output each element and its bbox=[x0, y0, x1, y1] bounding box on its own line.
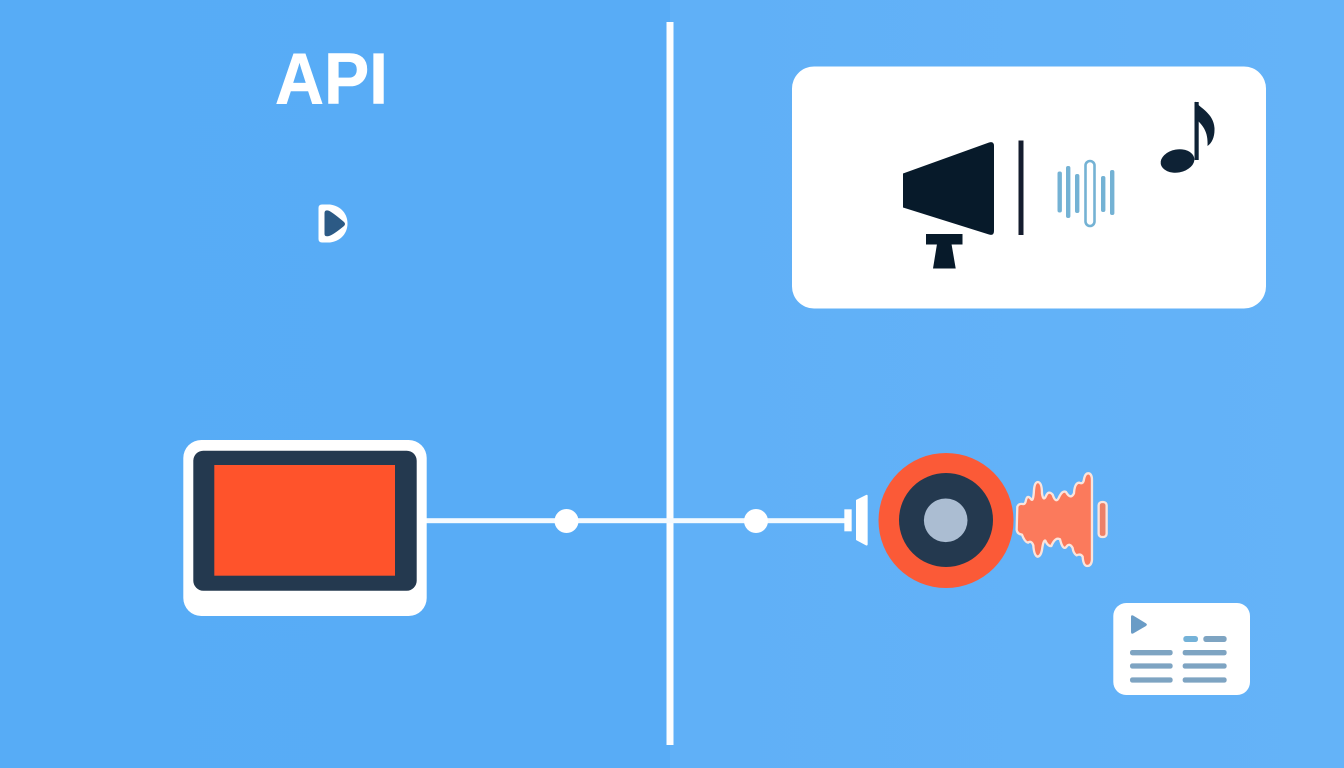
heading: API: API bbox=[275, 40, 388, 120]
icon: music note bbox=[1159, 102, 1215, 175]
divider bar bbox=[1018, 140, 1024, 235]
icon: red sound wave bbox=[1017, 473, 1107, 566]
icon: sound wave bbox=[1058, 161, 1114, 226]
text lines bbox=[1130, 636, 1227, 683]
icon: megaphone bbox=[903, 142, 994, 268]
icon: play badge bbox=[318, 204, 348, 242]
screen bbox=[214, 465, 395, 576]
connector line with nodes bbox=[425, 509, 850, 533]
panel: speaker and audio bbox=[792, 66, 1266, 308]
icon: speaker connector bbox=[844, 495, 868, 545]
device: tablet with red screen bbox=[183, 440, 427, 616]
icon: speaker disc bbox=[878, 453, 1014, 588]
card: playlist bbox=[1113, 603, 1250, 695]
vertical divider bbox=[666, 22, 674, 745]
icon: play triangle bbox=[1131, 615, 1147, 634]
